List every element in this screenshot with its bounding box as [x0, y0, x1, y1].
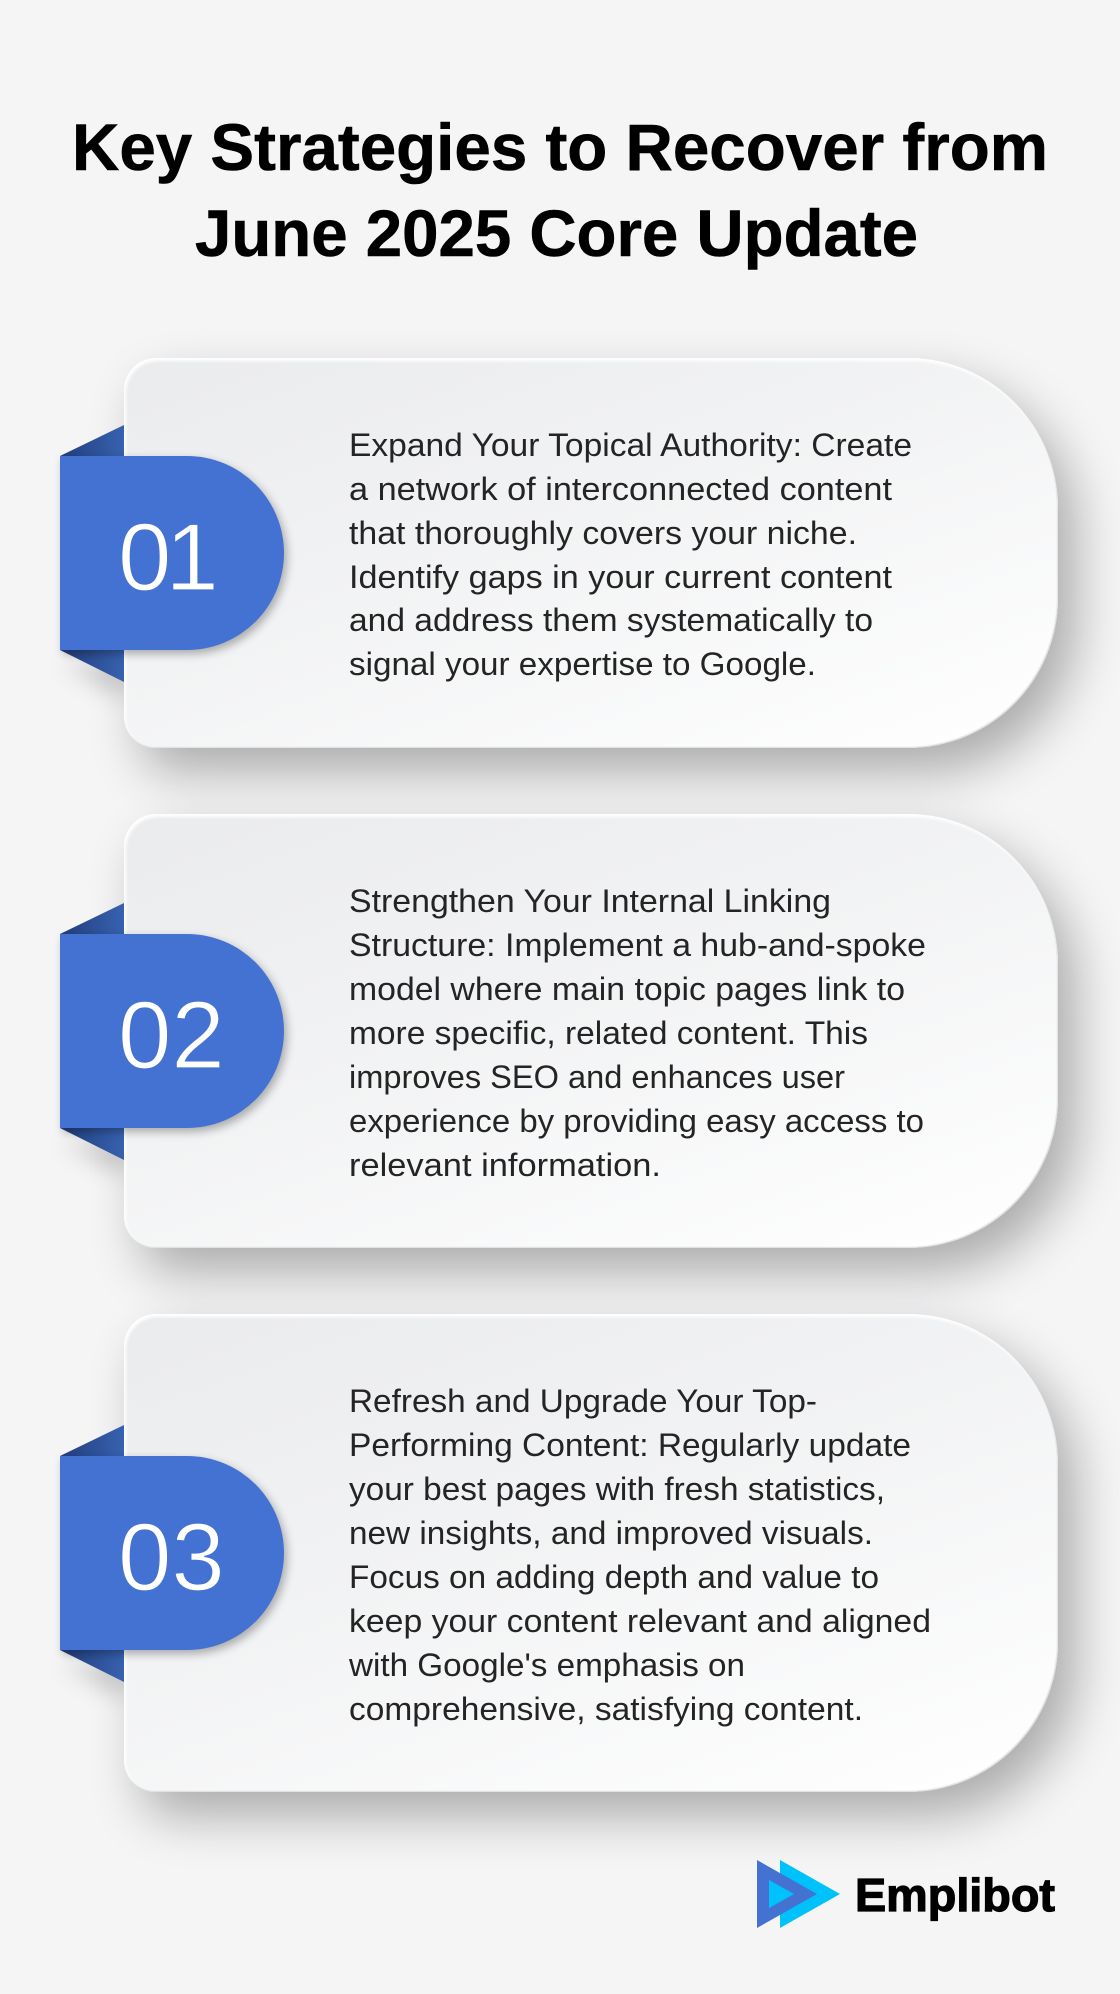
step number 01: 01	[118, 504, 219, 611]
body text: relevant information.	[349, 1147, 661, 1183]
body text	[349, 427, 912, 682]
body text: Performing Content: Regularly update	[349, 1427, 911, 1463]
body text: model where main topic pages link to	[349, 971, 905, 1007]
title: Key Strategies to Recover from	[72, 110, 1048, 184]
body text: comprehensive, satisfying content.	[349, 1691, 863, 1727]
panel: step 02	[58, 808, 1106, 1302]
body text: improves SEO and enhances user	[349, 1059, 845, 1095]
number tab	[60, 456, 284, 650]
folded ribbon	[60, 1425, 124, 1700]
body text: Identify gaps in your current content	[349, 559, 892, 595]
body text: Refresh and Upgrade Your Top-	[349, 1383, 817, 1419]
body text: and address them systematically to	[349, 602, 873, 638]
panel: step 01	[58, 352, 1106, 802]
number tab	[60, 1456, 284, 1650]
body text: Expand Your Topical Authority: Create	[349, 427, 912, 463]
body text: keep your content relevant and aligned	[349, 1603, 931, 1639]
body text: your best pages with fresh statistics,	[349, 1471, 885, 1507]
step number 02: 02	[118, 982, 225, 1089]
panel: step 03	[58, 1308, 1106, 1846]
card background	[124, 358, 1058, 748]
folded ribbon	[60, 425, 124, 700]
body text: experience by providing easy access to	[349, 1103, 924, 1139]
icon: play triangles	[757, 1860, 840, 1928]
number tab	[60, 934, 284, 1128]
body text: Strengthen Your Internal Linking	[349, 883, 831, 919]
body text: signal your expertise to Google.	[349, 646, 816, 682]
body text: with Google's emphasis on	[348, 1647, 745, 1683]
title: June 2025 Core Update	[195, 196, 918, 270]
body text: that thoroughly covers your niche.	[349, 515, 857, 551]
body text: Structure: Implement a hub-and-spoke	[349, 927, 926, 963]
body text: a network of interconnected content	[349, 471, 892, 507]
folded ribbon	[60, 903, 124, 1178]
logo: Emplibot	[757, 1860, 1055, 1928]
body text: more specific, related content. This	[349, 1015, 868, 1051]
card background	[124, 814, 1058, 1248]
body text: Focus on adding depth and value to	[349, 1559, 879, 1595]
body text: new insights, and improved visuals.	[349, 1515, 873, 1551]
body text	[348, 1383, 931, 1727]
card background	[124, 1314, 1058, 1792]
wordmark: Emplibot	[855, 1869, 1055, 1921]
body text	[349, 883, 926, 1183]
step number 03: 03	[118, 1504, 225, 1611]
title	[72, 110, 1048, 270]
